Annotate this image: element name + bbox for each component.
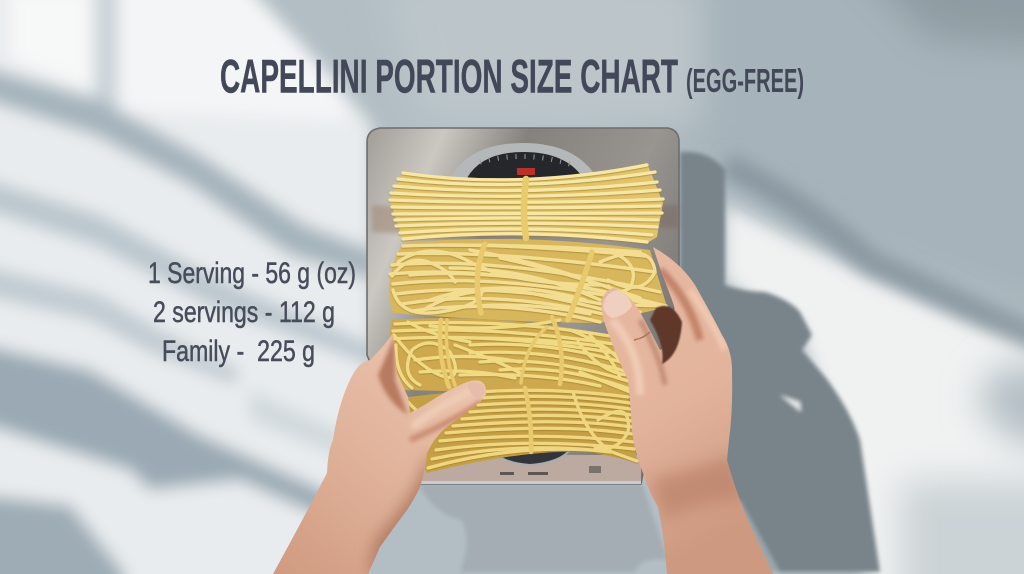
left hand (273, 333, 486, 574)
right hand (602, 247, 773, 574)
bundle 3: looped strands (390, 317, 632, 395)
bundle 4: lower strands (408, 388, 637, 473)
portion list: 1 Serving - 56 g (oz) (148, 257, 356, 290)
title: (EGG-FREE) (686, 62, 804, 99)
bundle 2: looped strands (389, 239, 667, 323)
scale base plate (367, 128, 679, 484)
finger gap (650, 306, 682, 364)
thumb nail (467, 383, 484, 399)
scale dial (450, 143, 601, 475)
portion list: Family - 225 g (162, 335, 315, 368)
portion list (148, 257, 356, 368)
thumb nail (603, 290, 632, 318)
hand shading (650, 455, 745, 520)
scale (367, 128, 679, 484)
title: CAPELLINI PORTION SIZE CHART (220, 50, 678, 102)
portion list: 2 servings - 112 g (153, 296, 335, 329)
pasta bundles (389, 163, 667, 473)
hand and scale shadows (418, 152, 880, 572)
bundle 1: straight strands (390, 163, 663, 243)
palm shading (378, 335, 408, 415)
